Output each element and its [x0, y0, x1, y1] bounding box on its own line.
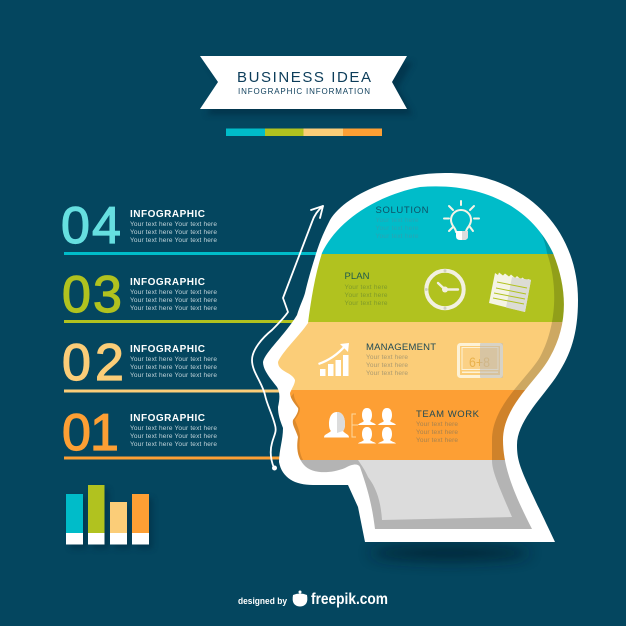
row 02: Your text here Your text here [130, 372, 217, 379]
title heading: BUSINESS IDEA [237, 69, 371, 86]
head shadow [370, 545, 530, 561]
solution text: Your text here [376, 217, 419, 224]
row 01: INFOGRAPHIC [130, 413, 205, 424]
head silhouette [263, 173, 580, 542]
plan text: Your text here [344, 284, 388, 291]
footer credit: freepik.com [311, 591, 388, 608]
solution text: SOLUTION [376, 205, 429, 216]
row 04 [61, 197, 326, 255]
row 04: Your text here Your text here [130, 229, 217, 236]
row 02 [62, 334, 284, 392]
team work text: TEAM WORK [416, 409, 480, 420]
arrow line [252, 206, 323, 470]
row 03: INFOGRAPHIC [130, 277, 205, 288]
plan text: Your text here [344, 292, 388, 299]
shaded inner edge [300, 234, 564, 529]
footer credit [238, 590, 388, 608]
management text: Your text here [366, 362, 408, 369]
row 02: Your text here Your text here [130, 356, 217, 363]
row 04: Your text here Your text here [130, 237, 217, 244]
solution text: Your text here [376, 233, 419, 240]
row 04: Your text here Your text here [130, 221, 217, 228]
row 01: Your text here Your text here [130, 441, 217, 448]
team work text: Your text here [416, 429, 458, 436]
row 03 [62, 266, 304, 324]
title ribbon [200, 56, 413, 115]
plan text: Your text here [344, 300, 388, 307]
plan text: PLAN [344, 271, 370, 282]
team work text: Your text here [416, 421, 458, 428]
white outline [263, 173, 578, 542]
row 02: Your text here Your text here [130, 364, 217, 371]
row 04: 04 [61, 197, 121, 255]
footer credit: designed by [238, 596, 287, 606]
icon: blackboard: 6+8 [469, 354, 490, 370]
icon: clock [425, 269, 464, 310]
colour bands [278, 186, 564, 529]
row 03: 03 [62, 266, 122, 324]
row 04: INFOGRAPHIC [130, 209, 205, 220]
row 03: Your text here Your text here [130, 289, 217, 296]
row 01: Your text here Your text here [130, 433, 217, 440]
management text [366, 342, 436, 377]
row 03: Your text here Your text here [130, 297, 217, 304]
icon: growth chart [318, 343, 349, 376]
row 02: 02 [62, 334, 124, 392]
team work text: Your text here [416, 437, 458, 444]
icon: blackboard [458, 343, 503, 378]
management text: Your text here [366, 370, 408, 377]
row 02: INFOGRAPHIC [130, 344, 205, 355]
plan text [344, 271, 388, 307]
management text: MANAGEMENT [366, 342, 436, 353]
subtitle: INFOGRAPHIC INFORMATION [238, 87, 370, 96]
row 03: Your text here Your text here [130, 305, 217, 312]
icon: light bulb [444, 201, 479, 240]
team work text [416, 409, 480, 444]
icon: team people [324, 408, 396, 444]
icon: notepad [489, 272, 531, 312]
solution text [376, 205, 429, 240]
colour key bar [226, 128, 382, 136]
row 01: Your text here Your text here [130, 425, 217, 432]
solution text: Your text here [376, 225, 419, 232]
bar chart [66, 485, 153, 549]
management text: Your text here [366, 354, 408, 361]
row 01 [62, 404, 284, 462]
row 01: 01 [62, 404, 119, 462]
